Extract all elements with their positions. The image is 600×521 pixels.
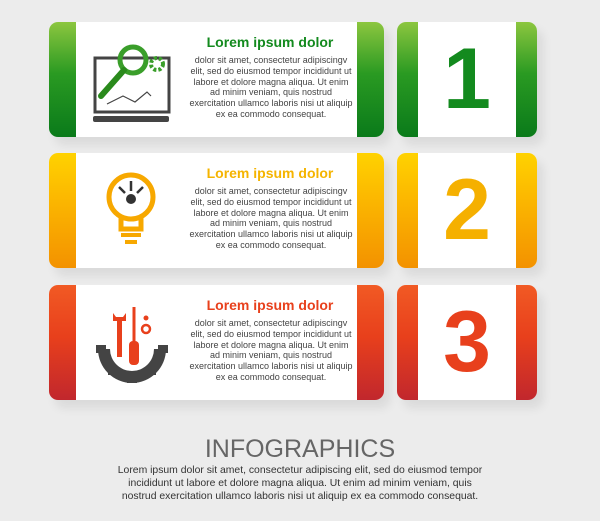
text block: dolor sit amet, consectetur adipiscingv elit, sed do eiusmod tempor incididunt ut labore et dolore magna aliqua. Ut enim ad minim veniam, quis nostrud exercitation ullamco laboris nisi ut aliquip ex ea commodo consequat. [189, 55, 353, 119]
icon: lightbulb [106, 172, 156, 244]
number card 3: 3 [443, 294, 491, 390]
heading: Lorem ipsum dolor [207, 297, 333, 313]
description text: Lorem ipsum dolor sit amet, consectetur adipiscing elit, sed do eiusmod tempor incididunt ut labore et dolore magna aliqua. Ut enim ad minim veniam, quis nostrud exercitation ullamco laboris nisi ut aliquip ex ea commodo consequat. [118, 465, 482, 502]
heading: Lorem ipsum dolor [207, 34, 333, 50]
panel: row 1 [49, 22, 384, 137]
text block: dolor sit amet, consectetur adipiscingv elit, sed do eiusmod tempor incididunt ut labore et dolore magna aliqua. Ut enim ad minim veniam, quis nostrud exercitation ullamco laboris nisi ut aliquip ex ea commodo consequat. [189, 318, 353, 382]
panel: row 3 [49, 285, 384, 400]
heading: Lorem ipsum dolor [207, 165, 333, 181]
panel: row 2 [49, 153, 384, 268]
number card 2: 2 [443, 162, 491, 258]
icon: tools and gear [96, 307, 168, 383]
icon: laptop with magnifier [93, 44, 170, 122]
number card 1: 1 [443, 31, 491, 127]
title: INFOGRAPHICS [205, 435, 395, 463]
number card 1 [397, 22, 537, 137]
number card 3 [397, 285, 537, 400]
text block: dolor sit amet, consectetur adipiscingv elit, sed do eiusmod tempor incididunt ut labore et dolore magna aliqua. Ut enim ad minim veniam, quis nostrud exercitation ullamco laboris nisi ut aliquip ex ea commodo consequat. [189, 186, 353, 250]
number card 2 [397, 153, 537, 268]
